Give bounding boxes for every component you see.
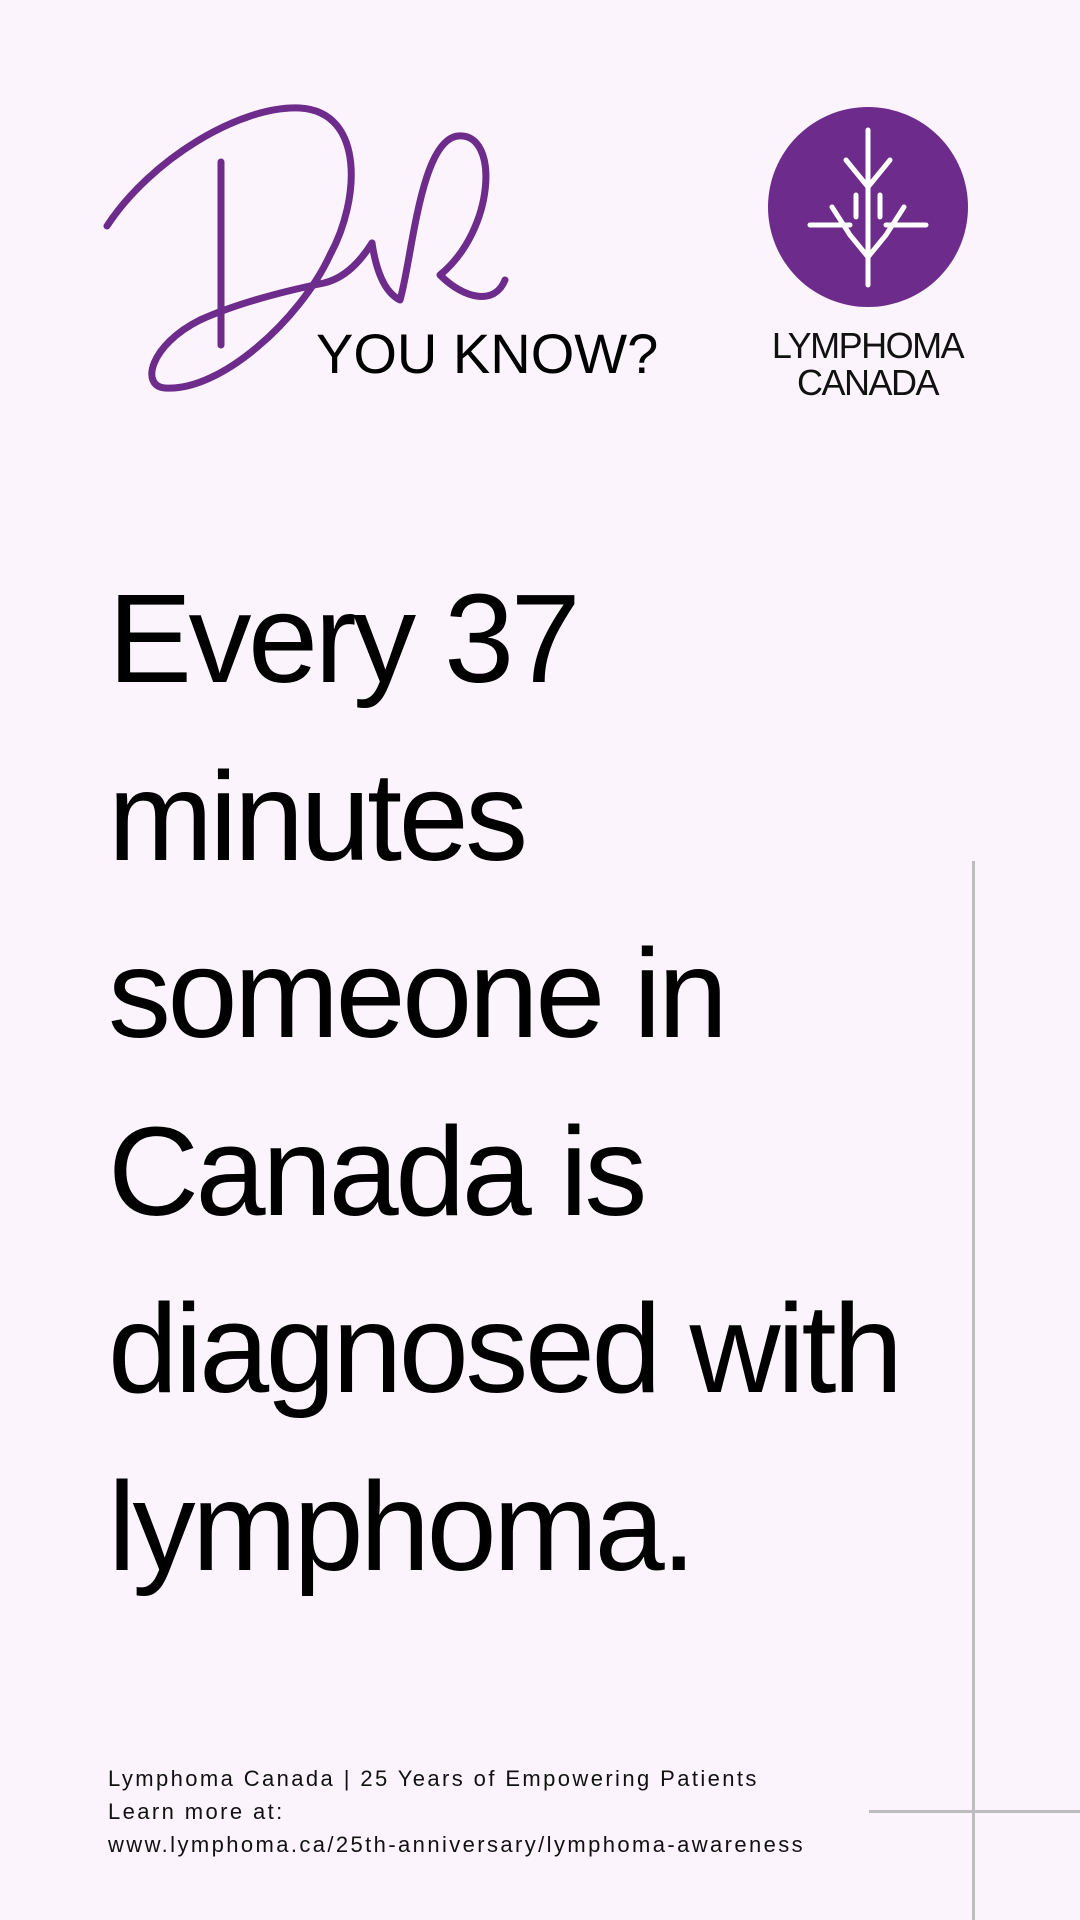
main statement: lymphoma.: [108, 1456, 693, 1596]
footer text: Learn more at:: [108, 1799, 285, 1824]
main statement: Canada is: [108, 1100, 644, 1242]
decorative vertical line: [972, 861, 975, 1920]
icon: tree circle: [768, 107, 968, 307]
main statement: [108, 568, 900, 1596]
text: YOU KNOW?: YOU KNOW?: [316, 322, 658, 385]
text: LYMPHOMA CANADA: CANADA: [797, 362, 938, 403]
main statement: Every 37: [108, 568, 577, 709]
script: Did: [107, 108, 505, 388]
footer text: Lymphoma Canada | 25 Years of Empowering Patients: [108, 1766, 759, 1791]
header: Did you know: [104, 104, 658, 392]
text: LYMPHOMA CANADA: LYMPHOMA: [772, 325, 963, 366]
main statement: someone in: [108, 923, 724, 1064]
main statement: diagnosed with: [108, 1278, 900, 1419]
footer text: www.lymphoma.ca/25th-anniversary/lymphoma-awareness: [108, 1832, 805, 1857]
footer text: [108, 1766, 805, 1857]
logo: Lymphoma Canada: [768, 107, 968, 403]
text: LYMPHOMA CANADA: [772, 325, 964, 403]
main statement: minutes: [108, 746, 525, 886]
